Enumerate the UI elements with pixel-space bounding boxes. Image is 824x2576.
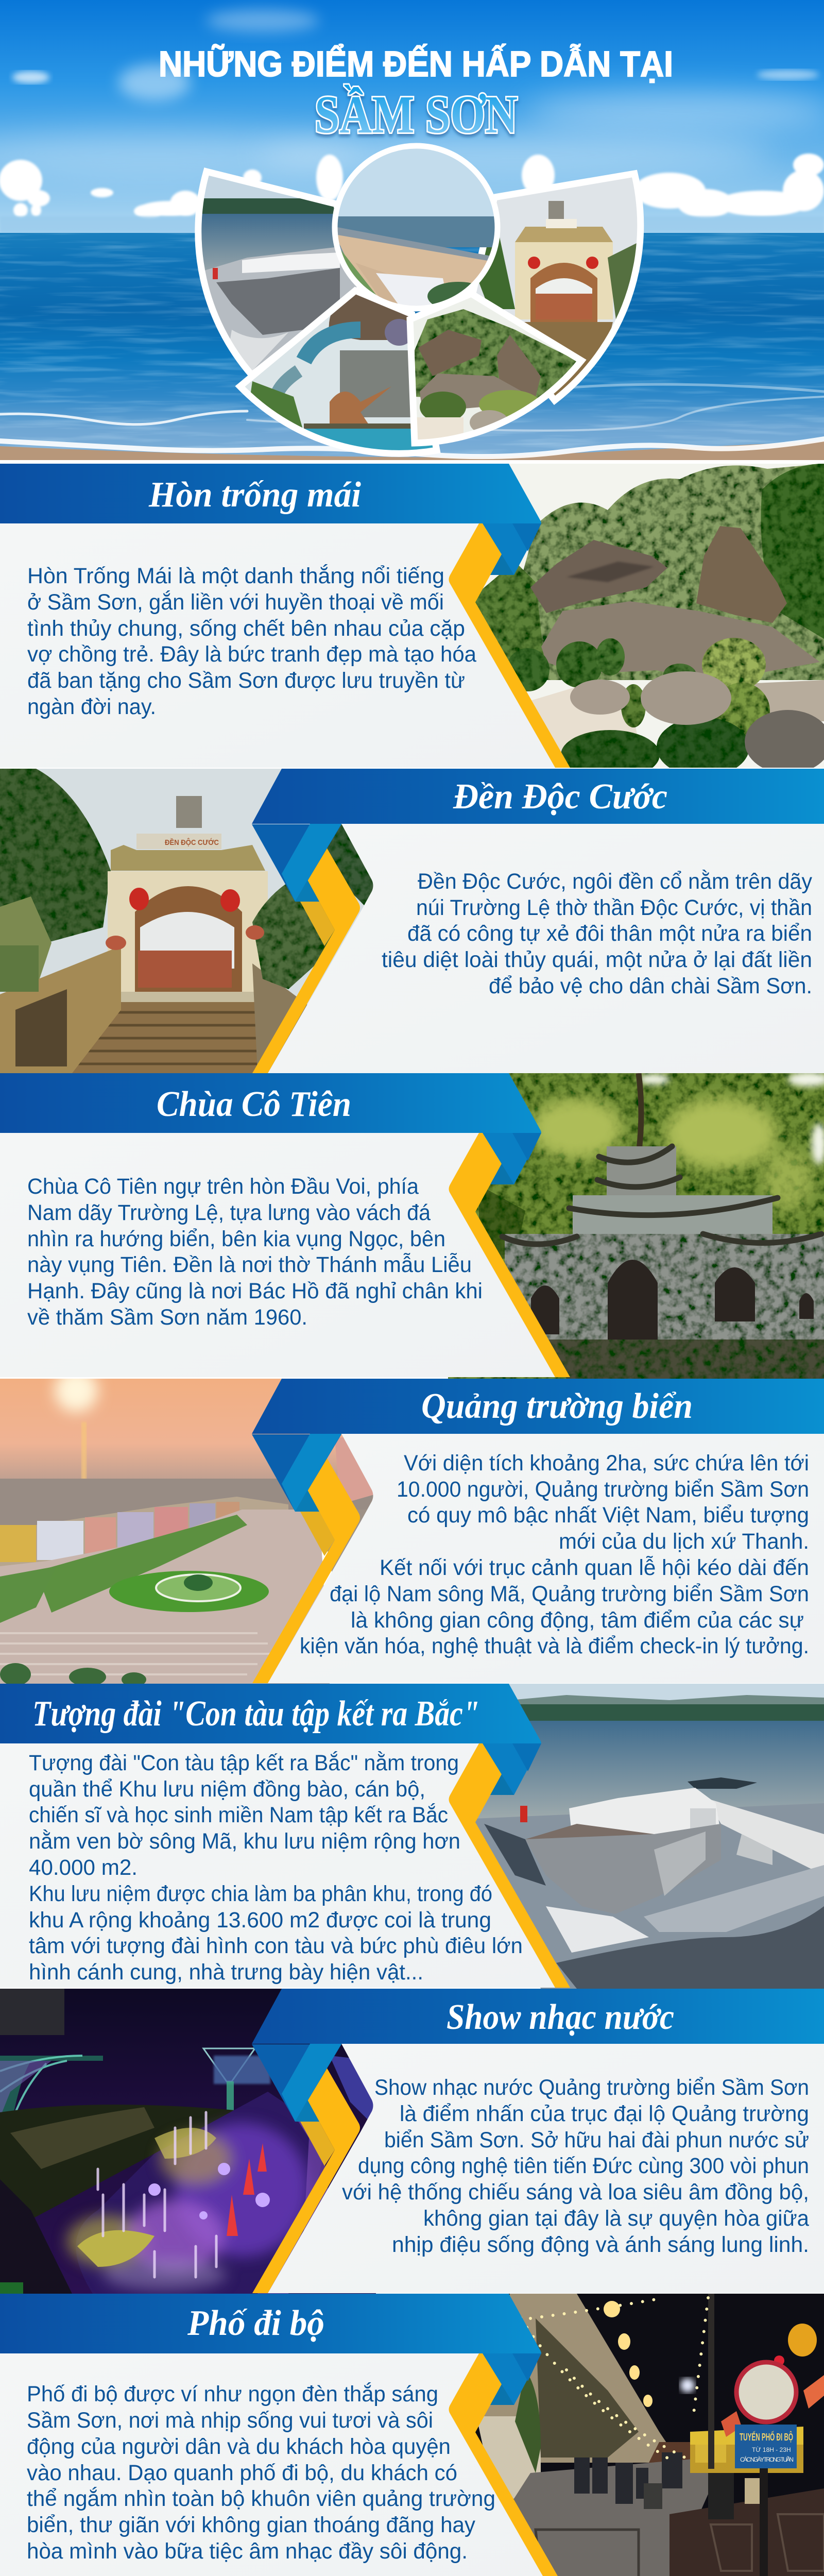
- section 5 text: quần thể Khu lưu niệm đồng bào, cán bộ,: [29, 1777, 425, 1802]
- section 1 photo: Hòn Trống Mái rocks: [475, 464, 824, 768]
- section 2 photo: Đền Độc Cước temple gate: [0, 769, 373, 1073]
- section 4 text: mới của du lịch xứ Thanh.: [559, 1529, 809, 1554]
- section 2 text: Đền Độc Cước, ngôi đền cổ nằm trên dãy: [418, 869, 812, 894]
- section 4 text: [300, 1451, 809, 1658]
- collage: water park: [237, 285, 443, 453]
- section 5 text: Khu lưu niệm được chia làm ba phân khu, trong đó: [29, 1882, 492, 1906]
- section 1 text: [27, 564, 476, 719]
- section 6 heading: Show nhạc nước: [447, 1997, 674, 2037]
- section 7 text: [27, 2382, 495, 2564]
- section 6 text: Show nhạc nước Quảng trường biển Sầm Sơn: [374, 2075, 809, 2100]
- title: NHỮNG ĐIỂM ĐẾN HẤP DẪN TẠI: [159, 43, 673, 84]
- section 1 text: Hòn Trống Mái là một danh thắng nổi tiếng: [27, 564, 444, 588]
- section 5 text: chiến sĩ và học sinh miền Nam tập kết ra Bắc: [29, 1803, 448, 1827]
- section 2 text: đã có công tự xẻ đôi thân một nửa ra biển: [407, 921, 812, 946]
- section 6 text: là điểm nhấn của trục đại lộ Quảng trường: [400, 2102, 809, 2126]
- section 2 heading: Đền Độc Cước: [453, 777, 667, 817]
- section 1 text: ngàn đời nay.: [27, 694, 156, 719]
- collage: Trống Mái rocks: [407, 291, 587, 446]
- section 6 text: dụng công nghệ tiên tiến Đức cùng 300 vòi phun: [358, 2154, 809, 2178]
- section 6 text: [342, 2075, 809, 2257]
- section 5 text: tâm với tượng đài hình con tàu và bức phù điêu lớn: [29, 1934, 523, 1958]
- section 3 text: Hạnh. Đây cũng là nơi Bác Hồ đã nghỉ chân khi: [27, 1279, 483, 1303]
- section 6 text: không gian tại đây là sự quyện hòa giữa: [423, 2206, 809, 2231]
- section 1 panel and banner: [0, 464, 570, 768]
- collage: ship monument: [196, 170, 371, 381]
- section 5 text: [29, 1751, 523, 1985]
- section 1 text: vợ chồng trẻ. Đây là bức tranh đẹp mà tạo hóa: [27, 642, 476, 667]
- section 4 text: là không gian công động, tâm điểm của các sự: [351, 1608, 804, 1633]
- section 3 text: nhìn ra hướng biển, bên kia vụng Ngọc, bên: [27, 1227, 445, 1251]
- section 7 text: hòa mình vào bữa tiệc âm nhạc đầy sôi động.: [27, 2539, 468, 2564]
- section 2 panel and banner: [252, 769, 824, 1073]
- section 4 panel and banner: [252, 1379, 824, 1683]
- clouds on the horizon: [0, 154, 824, 218]
- section 3 text: này vụng Tiên. Đền là nơi thờ Thánh mẫu Liễu: [27, 1252, 472, 1277]
- section 4 text: Với diện tích khoảng 2ha, sức chứa lên tới: [404, 1451, 809, 1476]
- section 7 photo: walking street at night: TỪ 18H - 23H: [752, 2446, 791, 2453]
- section 5 text: nằm ven bờ sông Mã, khu lưu niệm rộng hơn: [29, 1829, 460, 1854]
- section 5 text: 40.000 m2.: [29, 1855, 138, 1880]
- section 6 text: nhịp điệu sống động và ánh sáng lung linh.: [392, 2232, 809, 2257]
- section 6 text: với hệ thống chiếu sáng và loa siêu âm đồng bộ,: [342, 2180, 809, 2205]
- section 3 text: Nam dãy Trường Lệ, tựa lưng vào vách đá: [27, 1200, 431, 1225]
- title: [159, 43, 673, 144]
- section 1 text: tình thủy chung, sống chết bên nhau của cặp: [27, 616, 465, 641]
- section 3 text: [27, 1174, 483, 1330]
- section 2 text: để bảo vệ cho dân chài Sầm Sơn.: [489, 974, 812, 998]
- photo collage: [196, 144, 644, 453]
- section 4 text: Kết nối với trục cảnh quan lễ hội kéo dài đến: [380, 1555, 809, 1580]
- section 4 text: đại lộ Nam sông Mã, Quảng trường biển Sầm Sơn: [330, 1582, 809, 1606]
- section 1 text: ở Sầm Sơn, gắn liền với huyền thoại về mối: [27, 590, 444, 615]
- section 2 photo: Đền Độc Cước temple gate: ĐỀN ĐỘC CƯỚC: [165, 838, 219, 847]
- section 5 photo: ship monument: [475, 1684, 824, 1989]
- section 3 heading: Chùa Cô Tiên: [157, 1084, 351, 1124]
- section 7 text: Sầm Sơn, nơi mà nhịp sống vui tươi và sôi: [27, 2408, 433, 2433]
- section 3 panel and banner: [0, 1073, 570, 1377]
- section 5 panel and banner: [0, 1684, 570, 1988]
- section 7 text: vào nhau. Dạo quanh phố đi bộ, du khách có: [27, 2461, 457, 2485]
- section 4 photo: sea square at sunset: [0, 1379, 373, 1684]
- section 7 text: thể ngắm nhìn toàn bộ khuôn viên quảng trường: [27, 2486, 495, 2511]
- section 4 text: có quy mô bậc nhất Việt Nam, biểu tượng: [407, 1503, 809, 1528]
- section 2 text: [382, 869, 812, 998]
- section 7 panel and banner: [0, 2294, 570, 2576]
- section 1 text: đã ban tặng cho Sầm Sơn được lưu truyền từ: [27, 668, 465, 693]
- section 4 text: 10.000 người, Quảng trường biển Sầm Sơn: [397, 1477, 809, 1502]
- section 3 text: về thăm Sầm Sơn năm 1960.: [27, 1305, 307, 1330]
- section 5 text: khu A rộng khoảng 13.600 m2 được coi là trung: [29, 1908, 491, 1933]
- section 6 panel and banner: [252, 1989, 824, 2293]
- section 3 text: Chùa Cô Tiên ngự trên hòn Đầu Voi, phía: [27, 1174, 419, 1199]
- section 5 text: Tượng đài "Con tàu tập kết ra Bắc" nằm trong: [29, 1751, 459, 1775]
- section 7 text: biển, thư giãn với không gian thoáng đãng hay: [27, 2513, 475, 2537]
- section 3 photo: Chùa Cô Tiên pagoda: [448, 1073, 824, 1379]
- section 7 photo: walking street at night: [475, 2294, 824, 2576]
- section 4 heading: Quảng trường biển: [421, 1386, 693, 1426]
- title: place name: SẦM SƠN: [315, 84, 518, 144]
- section 6 text: biển Sầm Sơn. Sở hữu hai đài phun nước sử: [384, 2128, 809, 2153]
- section 2 text: núi Trường Lệ thờ thần Độc Cước, vị thần: [416, 895, 812, 920]
- foam and sand: [0, 441, 824, 460]
- section 2 text: tiêu diệt loài thủy quái, một nửa ở lại đất liền: [382, 947, 812, 972]
- section 6 photo: water music fountain show: [0, 1989, 376, 2294]
- section 7 text: động của người dân và du khách hòa quyện: [27, 2434, 451, 2459]
- collage: Độc Cước temple: [464, 170, 644, 407]
- collage: Sầm Sơn beach: [330, 144, 505, 319]
- header: sky and sea background: [0, 0, 824, 460]
- section 4 text: kiện văn hóa, nghệ thuật và là điểm check-in lý tưởng.: [300, 1634, 809, 1658]
- section 7 text: Phố đi bộ được ví như ngọn đèn thắp sáng: [27, 2382, 438, 2406]
- section 5 heading: Tượng đài "Con tàu tập kết ra Bắc": [32, 1694, 479, 1734]
- section 1 heading: Hòn trống mái: [148, 475, 362, 515]
- section 7 photo: walking street at night: CÁC NGÀY TRONG TUẦN: [740, 2455, 794, 2463]
- section 5 text: hình cánh cung, nhà trưng bày hiện vật...: [29, 1960, 423, 1985]
- section 7 heading: Phố đi bộ: [187, 2303, 324, 2343]
